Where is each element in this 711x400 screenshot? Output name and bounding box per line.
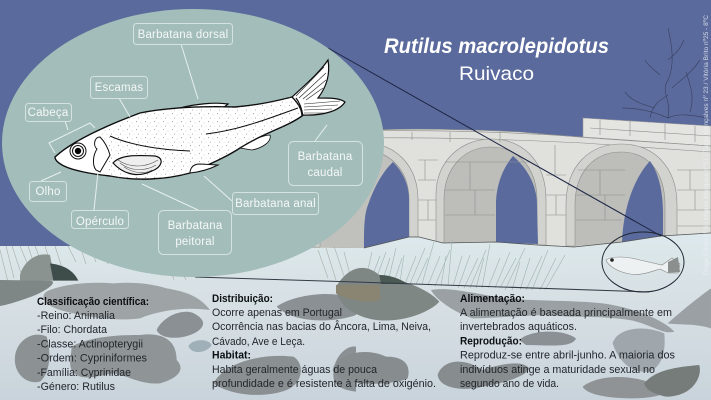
label: Barbatana caudal [288, 142, 362, 186]
bridge [300, 118, 711, 248]
title: Rutilus macrolepidotus [384, 35, 609, 58]
rocks, right half [333, 268, 711, 398]
text block: distribution and habitat [212, 293, 436, 390]
masonry joints [412, 120, 711, 226]
text block: classification: -Classe: Actinopterygii [37, 338, 143, 350]
label: Olho: Olho [35, 186, 61, 198]
label: Barbatana anal [232, 192, 318, 214]
label: Barbatana dorsal: Barbatana dorsal [138, 29, 228, 41]
tail fin [292, 60, 345, 115]
text block: classification: -Família: Cyprinidae [37, 367, 131, 379]
bridge wall [300, 129, 711, 248]
text block: classification: -Ordem: Cypriniformes [37, 352, 147, 364]
text block: distribution and habitat: Ocorre apenas em Portugal [212, 307, 342, 319]
label: Barbatana anal: Barbatana anal [235, 198, 316, 210]
text block: feeding and reproduction: segundo ano de vida. [460, 378, 559, 390]
pectoral fin [113, 156, 161, 175]
text block: feeding and reproduction: invertebrados aquáticos. [460, 321, 577, 333]
dorsal fin [180, 103, 233, 110]
text block: distribution and habitat: profundidade e é resistente à falta de oxigénio. [212, 378, 436, 390]
label: Barbatana caudal: caudal [307, 167, 343, 179]
arch 1 shaded vault [320, 151, 409, 248]
large fish illustration [55, 60, 345, 179]
rocks, left half [0, 254, 356, 395]
text block: distribution and habitat: Distribuição: [212, 293, 273, 305]
credits vertical text: Diogo Costa nº 6 / Miguel Marques nº17 / Tiago Gonçalves nº 23 / Vitória Brito nº25 - 8ºC [703, 15, 710, 275]
text block: feeding and reproduction: A alimentação é baseada principalmente em [460, 307, 672, 319]
riverbank grass [0, 240, 565, 290]
label: Barbatana peitoral [158, 210, 232, 254]
ventral rear fin [240, 135, 270, 150]
text block: feeding and reproduction: Reproduz-se entre abril-junho. A maioria dos [460, 350, 675, 362]
text block: classification: -Filo: Chordata [37, 324, 107, 336]
subtitle: Ruivaco [459, 63, 534, 85]
text block: classification: Classificação científica: [37, 296, 149, 308]
bridge base line [364, 233, 711, 248]
text block: feeding and reproduction: indivíduos atinge a maturidade sexual no [460, 364, 655, 376]
small fish [606, 257, 680, 275]
arch 3 stone ring [566, 144, 677, 246]
label: Escamas [90, 76, 148, 98]
zoom ellipse panel [2, 9, 384, 277]
text block: distribution and habitat: Ocorrência nas bacias do Âncora, Lima, Neiva, [212, 320, 431, 333]
label leader lines [41, 44, 327, 210]
arch 3 shaded vault [575, 152, 665, 246]
text block: distribution and habitat: Cávado, Ave e Leça. [212, 336, 305, 348]
text block: feeding and reproduction: Alimentação: [460, 293, 525, 305]
title [384, 35, 609, 85]
small fish circle [602, 232, 684, 292]
label: Opérculo [72, 210, 128, 228]
label: Escamas: Escamas [95, 82, 143, 94]
text block: feeding and reproduction: Reprodução: [460, 336, 522, 348]
arch 2 shaded vault [444, 147, 537, 244]
text block: classification [37, 296, 149, 393]
label: Opérculo: Opérculo [76, 216, 124, 228]
text block: classification: -Género: Rutilus [37, 381, 115, 393]
sky through arches [364, 162, 409, 248]
body [55, 97, 302, 179]
text block: distribution and habitat: Habita geralmente águas de pouca [212, 364, 377, 376]
lateral lines [110, 108, 298, 151]
right parapet block [583, 118, 711, 240]
arch 2 stone ring [436, 139, 546, 245]
label: Cabeça: Cabeça [28, 107, 69, 119]
label: Barbatana caudal: Barbatana [298, 151, 353, 163]
label: Cabeça [26, 104, 72, 122]
tail base mark [296, 98, 303, 116]
label: Barbatana peitoral: Barbatana [168, 220, 223, 232]
arch 1 stone ring [312, 143, 418, 247]
bare tree branches [622, 28, 708, 118]
river water [0, 233, 711, 400]
label: Barbatana peitoral: peitoral [175, 236, 215, 248]
label: Olho [30, 182, 66, 202]
leader line to small fish (top) [328, 48, 661, 236]
head bracket [49, 123, 95, 153]
leader line to small fish (bottom) [195, 277, 649, 292]
text block: feeding and reproduction [460, 293, 675, 390]
text block: classification: -Reino: Animalia [37, 310, 115, 322]
anal fin [190, 164, 218, 173]
label: Barbatana dorsal [134, 24, 232, 44]
eye [70, 143, 86, 159]
text block: distribution and habitat: Habitat: [212, 350, 251, 362]
gill cover [93, 137, 110, 172]
